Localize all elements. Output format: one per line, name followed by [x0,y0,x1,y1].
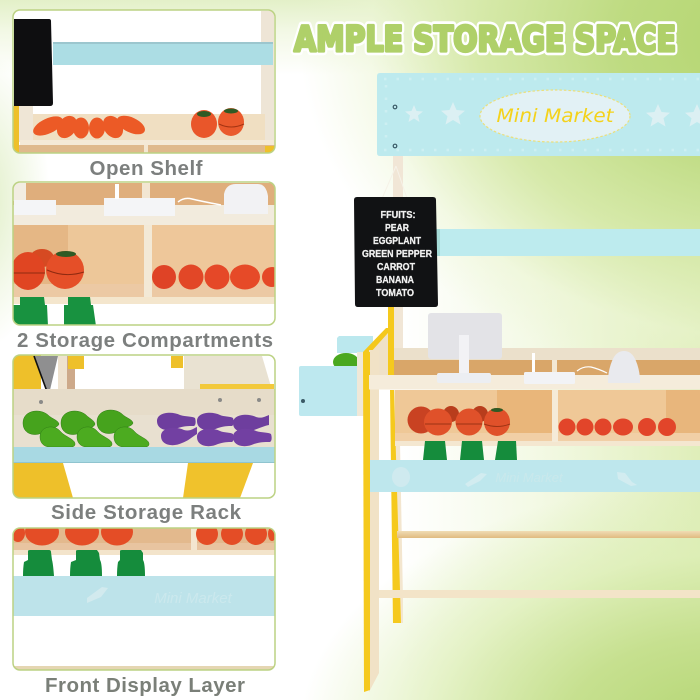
panel: front display layer [11,518,276,670]
peppers [423,441,517,460]
icon: blackboard crop [14,19,53,106]
side bin [299,336,373,416]
side panel [369,333,388,375]
panel: front display layer: Mini Market [154,590,233,607]
blackboard: GREEN PEPPER [362,248,432,260]
carrots [558,418,676,436]
router [524,353,607,384]
blackboard: TOMATO [376,287,414,299]
back leg [394,390,403,623]
tomatoes [408,406,510,436]
blackboard: PEAR [385,222,409,234]
compartments [395,390,700,434]
illustration: market stand [299,156,700,692]
peppers [13,297,48,326]
carrots [30,112,148,142]
hanging string [381,166,408,201]
label: open shelf: Open Shelf [90,157,203,180]
devices [14,200,56,215]
tomatoes [32,249,54,267]
stars [405,102,700,127]
wooden rails [397,531,700,538]
label: side storage rack: Side Storage Rack [51,501,242,524]
front blue band [370,460,700,492]
front leg [363,350,379,692]
pears [23,410,149,447]
oval badge [480,90,630,142]
tomatoes [191,108,244,138]
blue back bar [436,229,700,256]
blackboard: BANANA [376,274,414,286]
tomatoes and carrots [14,528,274,546]
panel: open shelf [13,10,275,153]
blackboard: FFUITS: [380,209,416,221]
back yellow strip [388,307,394,377]
panel: side storage rack [13,355,275,498]
front blue band: Mini Market [495,470,564,485]
counter top [369,375,700,390]
label: 2 storage compartments: 2 Storage Compartments [17,329,273,352]
panel border [13,10,275,153]
panel: 2 storage compartments [11,182,282,326]
upper shelf [394,348,700,360]
blackboard [354,197,438,307]
sign: mini market [377,73,700,156]
monitor [428,313,502,383]
carrots [152,265,176,289]
back post [393,156,403,351]
label: front display layer: Front Display Layer [45,674,245,697]
sign text: Mini Market [496,105,615,127]
blackboard: EGGPLANT [373,235,421,247]
peppers [23,550,145,576]
scale [608,351,640,383]
blackboard: CARROT [377,261,415,273]
eggplants [157,413,272,446]
